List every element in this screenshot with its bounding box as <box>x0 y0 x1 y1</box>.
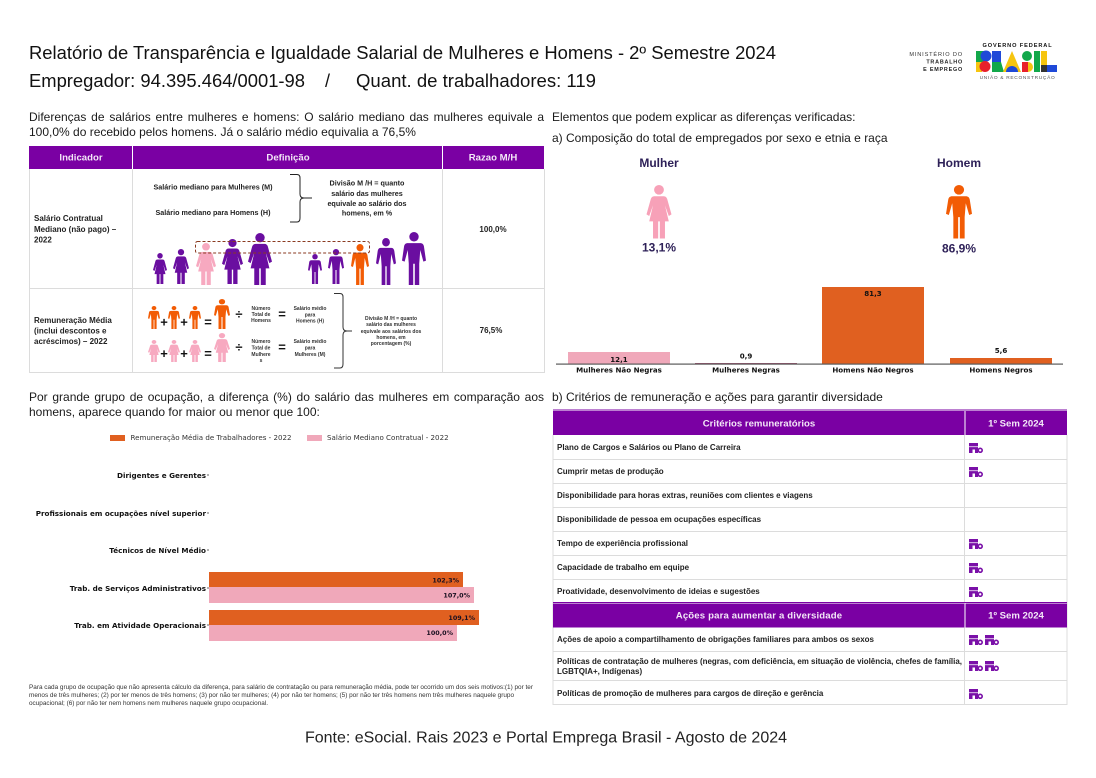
rows: critérios: Plano de Cargos e Salários ou Plano de Carreira <box>557 443 741 452</box>
rows: ações: LGBTQIA+, Indígenas) <box>557 667 642 676</box>
brace <box>290 174 312 222</box>
row label: salário contratual: Salário Contratual <box>34 214 103 223</box>
footnote: menos de três mulheres; (2) por ter menos de três homens; (3) por não ter mulheres; (4) por não ter homens; (5) por não ter três homens nem três mulheres naquele grupo <box>29 692 514 699</box>
formula: mulheres: + <box>180 346 188 361</box>
formula: mulheres: para <box>305 346 315 352</box>
logo: ministério e governo federal: MINISTÉRIO DO <box>909 51 963 58</box>
formula: homens: ÷ <box>235 306 243 322</box>
formula: homens: Número <box>252 306 270 312</box>
bar chart: grupo de ocupação: Trab. de Serviços Administrativos <box>70 584 206 593</box>
value: 100,0%: 100,0% <box>479 225 507 234</box>
title <box>29 43 776 91</box>
table: critérios remuneratórios e ações <box>553 410 1067 704</box>
bar chart: sexo e etnia/raça: Homens Negros <box>969 366 1033 374</box>
formula: mulheres: + <box>160 346 168 361</box>
title: Relatório de Transparência e Igualdade Salarial de Mulheres e Homens - 2º Semestre 2024 <box>29 43 776 63</box>
text: divisão percentual: equivale aos salários dos <box>361 329 422 335</box>
formula: homens: Salário médio <box>294 306 326 312</box>
formula: homens: = <box>278 306 286 322</box>
bar chart legend: Remuneração Média de Trabalhadores - 2022 <box>130 433 292 442</box>
bar chart: grupo de ocupação: Profissionais em ocupações nível superior <box>36 509 206 518</box>
header: ações: Ações para aumentar a diversidade <box>676 610 842 622</box>
formula: mulheres: = <box>278 340 286 354</box>
text block: diferenças de salários <box>29 110 544 138</box>
bar chart: sexo e etnia/raça: Mulheres Negras <box>712 366 780 374</box>
text: salário mediano <box>153 182 273 217</box>
row label: remuneração média <box>34 316 112 346</box>
dashed median highlight <box>196 242 370 253</box>
homem <box>937 156 981 256</box>
formula: homens: Total de <box>252 312 271 318</box>
icons: homens mediana <box>308 232 426 285</box>
rows: critérios: Tempo de experiência profissional <box>557 539 688 548</box>
logo: ministério e governo federal: UNIÃO & RECONSTRUÇÃO <box>980 74 1055 81</box>
heading: elementos: Elementos que podem explicar as diferenças verificadas: <box>552 110 856 124</box>
table header: Definição <box>266 152 310 164</box>
formula: mulheres: Salário médio <box>294 339 326 345</box>
mulher: 13,1% <box>642 240 676 254</box>
rows: ações: Políticas de contratação de mulheres (negras, com deficiência, em situação de violência, chefes de família, <box>557 657 962 666</box>
title: Quant. de trabalhadores: 119 <box>356 71 596 91</box>
bar chart: grupo de ocupação: 100,0% <box>426 629 454 637</box>
icons: ações <box>969 635 998 699</box>
bar chart: grupo de ocupação: Dirigentes e Gerentes <box>117 471 206 480</box>
formula: mulheres <box>148 333 326 364</box>
bar chart: grupo de ocupação: 109,1% <box>448 614 476 622</box>
text: salário mediano: Salário mediano para Mulheres (M) <box>153 182 273 192</box>
row label: remuneração média: (inclui descontos e <box>34 326 107 336</box>
formula: homens <box>148 299 326 330</box>
homem: 86,9% <box>942 242 976 256</box>
rows: ações: Ações de apoio a compartilhamento de obrigações familiares para ambos os sexos <box>557 635 875 644</box>
bar chart: grupo de ocupação: Trab. em Atividade Operacionais <box>74 621 206 630</box>
rows: critérios <box>557 443 813 596</box>
bar chart: sexo e etnia/raça: 5,6 <box>995 346 1007 355</box>
bar chart: sexo e etnia/raça: 0,9 <box>740 352 752 360</box>
logo: ministério e governo federal: GOVERNO FEDERAL <box>982 43 1053 49</box>
text block: grande grupo de ocupação: Por grande grupo de ocupação, a diferença (%) do salário das mulheres em comparação aos <box>29 390 544 404</box>
bar chart: grupo de ocupação: Técnicos de Nível Médio <box>109 546 206 555</box>
heading: composição: a) Composição do total de empregados por sexo e etnia e raça <box>552 131 888 145</box>
formula: homens: + <box>180 314 188 330</box>
formula: mulheres: = <box>204 346 212 361</box>
row label: remuneração média: acréscimos) – 2022 <box>34 337 108 346</box>
row label: salário contratual <box>34 214 117 244</box>
title: Empregador: 94.395.464/0001-98 <box>29 71 305 91</box>
source: Fonte: eSocial. Rais 2023 e Portal Emprega Brasil - Agosto de 2024 <box>305 730 787 746</box>
bar chart: sexo e etnia/raça: Mulheres Não Negras <box>576 366 662 374</box>
text: divisão percentual: homens, em <box>376 335 406 341</box>
rows: ações <box>557 635 962 698</box>
bar chart legend: Salário Mediano Contratual - 2022 <box>327 433 449 442</box>
rows: critérios: Disponibilidade para horas extras, reuniões com clientes e viagens <box>557 491 813 500</box>
row label: salário contratual: Mediano (não pago) – <box>34 225 117 234</box>
header: ações: 1º Sem 2024 <box>988 610 1045 622</box>
rows: critérios: Disponibilidade de pessoa em ocupações específicas <box>557 515 762 524</box>
footnote <box>29 684 534 707</box>
title: / <box>325 71 330 91</box>
logo: ministério e governo federal: TRABALHO <box>926 60 963 66</box>
formula: homens: Homens <box>251 318 271 324</box>
text: divisão percentual: Divisão M /H = quanto <box>365 316 417 322</box>
value: 76,5%: 76,5% <box>480 326 502 335</box>
text: divisão M/H: equivale ao salário dos <box>327 199 407 208</box>
formula: homens: Homens (H) <box>296 318 324 324</box>
formula: mulheres: ÷ <box>235 340 243 354</box>
icons: mulheres mediana <box>153 233 272 285</box>
formula: mulheres: Mulhere <box>251 352 271 358</box>
footnote: ocupacional; (6) por não ter nem homens nem mulheres naquele grupo ocupacional. <box>29 700 268 707</box>
text: divisão percentual: salário das mulheres <box>366 322 416 328</box>
rows: critérios: Capacidade de trabalho em equipe <box>557 563 690 572</box>
brace <box>334 294 352 368</box>
text: divisão percentual: porcentagem (%) <box>371 341 412 347</box>
bar chart: grupo de ocupação: 102,3% <box>432 576 460 584</box>
mulher: Mulher <box>639 156 679 170</box>
rows: critérios: Cumprir metas de produção <box>557 467 664 476</box>
text: divisão M/H: homens, em % <box>342 208 393 218</box>
text block: grande grupo de ocupação: homens, aparece quando for maior ou menor que 100: <box>29 404 320 418</box>
table header: Razao M/H <box>469 152 517 164</box>
bar chart: sexo e etnia/raça: 12,1 <box>610 355 628 364</box>
text block: diferenças de salários: 100,0% do recebido pelos homens. Já o salário médio equivalia a 76,5% <box>29 124 416 138</box>
row label: salário contratual: 2022 <box>34 236 52 244</box>
formula: mulheres: Número <box>252 339 270 345</box>
bar chart legend <box>110 433 449 442</box>
heading: critérios: b) Critérios de remuneração e ações para garantir diversidade <box>552 390 883 404</box>
text: divisão percentual <box>361 316 422 347</box>
bar chart: sexo e etnia/raça <box>556 287 1063 374</box>
header: critérios <box>553 410 1067 435</box>
table header: Indicador <box>59 152 103 164</box>
header: ações <box>553 602 1067 628</box>
text: salário mediano: Salário mediano para Homens (H) <box>155 208 271 217</box>
text: divisão M/H: salário das mulheres <box>331 189 403 198</box>
bar chart: sexo e etnia/raça: 81,3 <box>864 289 882 298</box>
icons: critérios <box>969 443 982 597</box>
rows: critérios: Proatividade, desenvolvimento de ideias e sugestões <box>557 587 760 596</box>
homem: Homem <box>937 156 981 170</box>
formula: mulheres: Mulheres (M) <box>295 352 326 358</box>
chart: composição por sexo <box>639 156 981 256</box>
text block: diferenças de salários: Diferenças de salários entre mulheres e homens: O salário mediano das mulheres equivale a <box>29 110 544 124</box>
header: critérios: 1º Sem 2024 <box>988 418 1045 430</box>
formula: mulheres: Total de <box>252 346 271 352</box>
logo: ministério e governo federal <box>909 43 1057 81</box>
bar chart: grupo de ocupação: 107,0% <box>443 592 471 600</box>
text block: grande grupo de ocupação <box>29 390 544 418</box>
bar chart: sexo e etnia/raça: Homens Não Negros <box>832 366 914 374</box>
formula: homens: para <box>305 312 315 318</box>
bar chart: grupo de ocupação <box>36 471 479 641</box>
text: divisão M/H: Divisão M /H = quanto <box>330 178 405 188</box>
panel: tabela de indicadores <box>29 146 544 372</box>
row label: remuneração média: Remuneração Média <box>34 316 112 325</box>
logo: ministério e governo federal: E EMPREGO <box>923 67 963 73</box>
text: divisão M/H <box>327 178 407 218</box>
mulher <box>639 156 679 254</box>
footnote: Para cada grupo de ocupação que não apresenta cálculo da diferença, para salário de contratação ou para remuneração média, pode ter ocorrido um dos seis motivos:(1) por ter <box>29 684 534 691</box>
formula: homens: = <box>204 314 212 330</box>
formula: homens: + <box>160 314 168 330</box>
header: critérios: Critérios remuneratórios <box>703 418 815 430</box>
rows: ações: Políticas de promoção de mulheres para cargos de direção e gerência <box>557 689 824 698</box>
formula: mulheres: s <box>260 358 263 364</box>
table header <box>29 146 544 169</box>
